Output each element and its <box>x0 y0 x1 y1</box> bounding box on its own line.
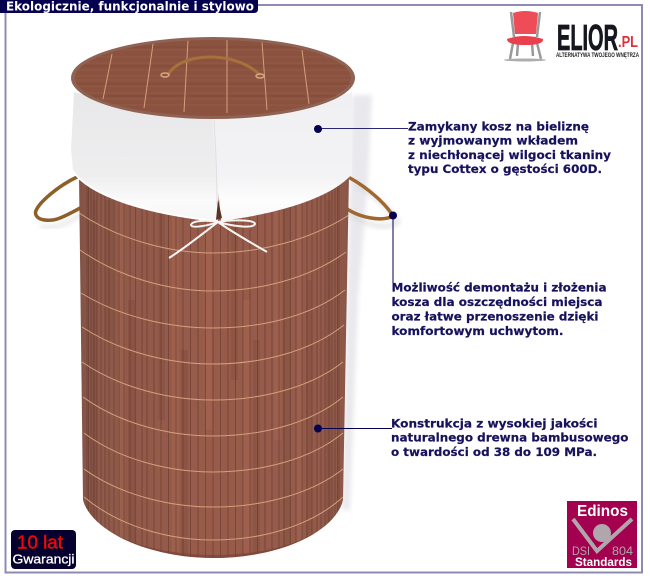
callout text: z wyjmowanym wkładem <box>408 134 578 148</box>
callout text: z niechłonącej wilgoci tkaniny <box>408 148 612 162</box>
badge: Edinos standards: Edinos <box>577 503 628 520</box>
logo: Elior <box>504 11 639 62</box>
left handle <box>35 177 88 227</box>
callout text: komfortowym uchwytom. <box>392 324 564 338</box>
callout text: oraz łatwe przenoszenie dzięki <box>392 310 598 324</box>
bamboo body <box>75 170 355 565</box>
drawstring bow <box>169 220 267 258</box>
badge: Edinos standards: Standards <box>575 555 632 569</box>
callout text: kosza dla oszczędności miejsca <box>392 295 602 309</box>
badge: 10 lat warranty: 10 lat <box>17 532 63 552</box>
badge: Edinos standards <box>567 501 637 569</box>
callout: handles <box>389 212 606 338</box>
marker dot <box>389 212 397 220</box>
fabric liner <box>71 92 352 221</box>
lid <box>70 37 360 119</box>
callout text <box>391 416 629 459</box>
badge: 10 lat warranty: Gwarancji <box>12 552 75 566</box>
right handle <box>339 178 398 226</box>
callout text: typu Cottex o gęstości 600D. <box>408 162 602 176</box>
callout text: naturalnego drewna bambusowego <box>391 430 629 444</box>
callout text: Konstrukcja z wysokiej jakości <box>391 416 598 430</box>
callout text <box>408 120 612 176</box>
badge: Edinos standards: DSI <box>572 544 590 558</box>
basket photo <box>35 37 398 565</box>
leader line <box>318 428 392 430</box>
binding threads <box>79 213 349 540</box>
basket shadow <box>342 95 372 510</box>
callout text: Możliwość demontażu i złożenia <box>392 280 606 294</box>
domain suffix: .PL <box>618 34 638 51</box>
badge: 10 lat warranty <box>11 530 76 569</box>
callout text: o twardości od 38 do 109 MPa. <box>391 445 597 459</box>
callout: lid and liner <box>314 120 612 176</box>
leader line <box>392 215 394 283</box>
callout: bamboo construction <box>314 416 629 459</box>
callout text <box>392 280 606 338</box>
marker dot <box>314 424 322 432</box>
icon: red chair <box>504 11 546 62</box>
badge: Edinos standards: 804 <box>612 544 633 558</box>
lid handle <box>161 57 264 78</box>
marker dot <box>314 125 322 133</box>
bottom rim <box>83 503 343 556</box>
leader line <box>318 128 408 130</box>
callout text: Zamykany kosz na bieliznę <box>408 120 589 134</box>
